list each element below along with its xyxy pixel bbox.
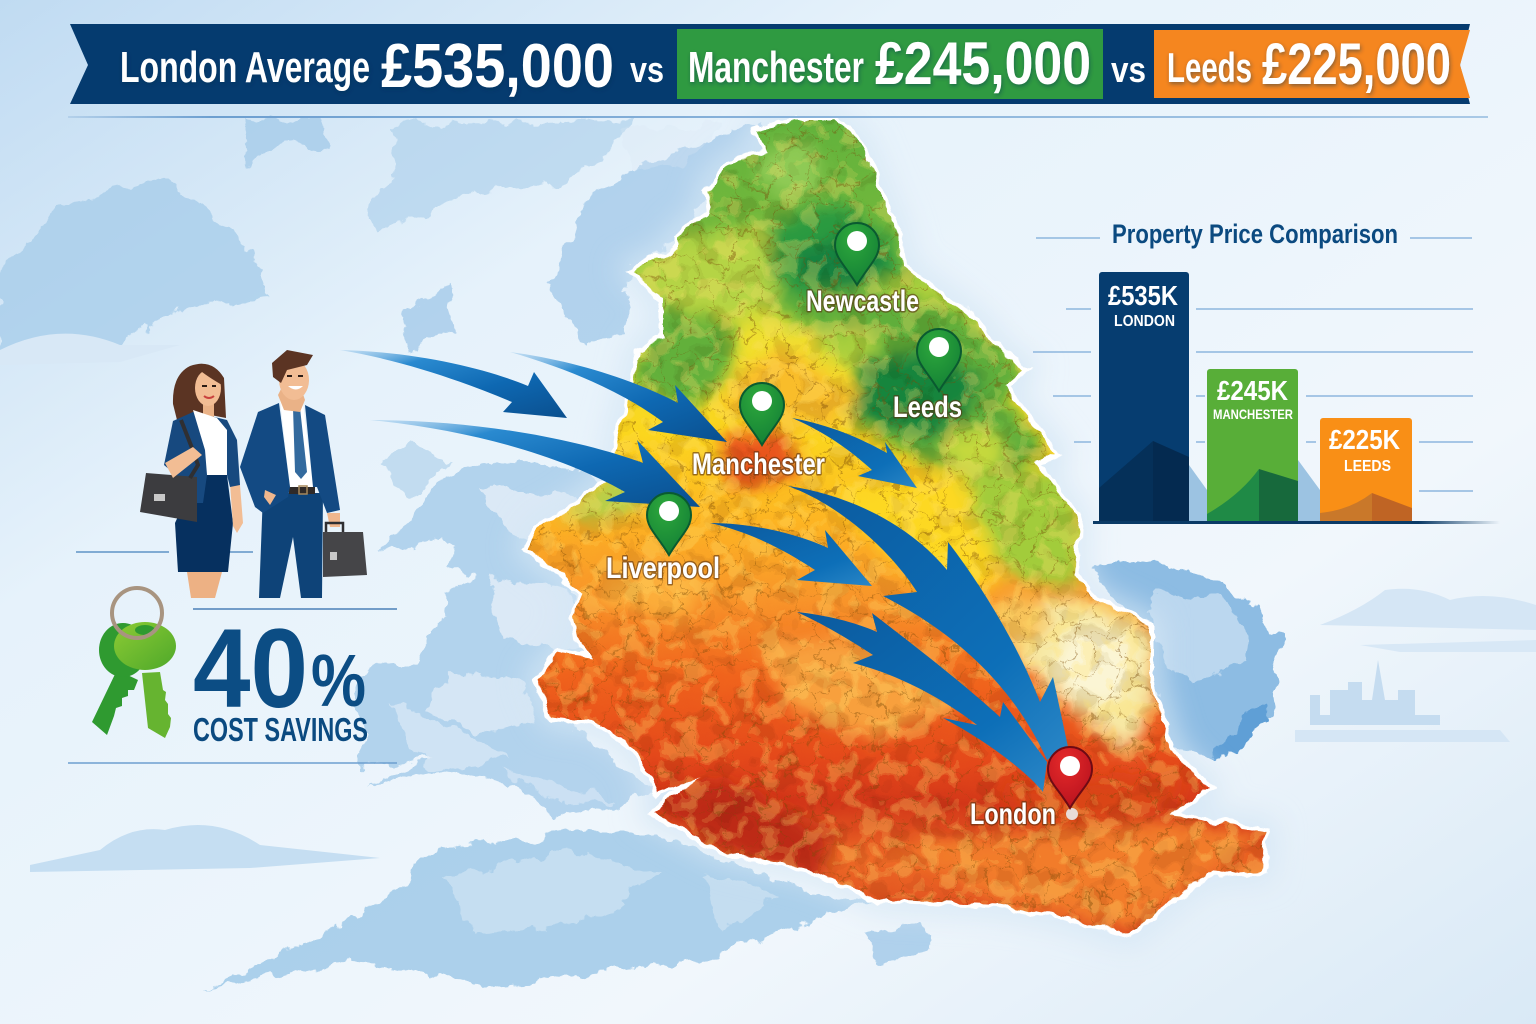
label: Liverpool: Liverpool bbox=[606, 552, 720, 585]
chart: property price comparison bbox=[1033, 219, 1500, 524]
callout: 40% cost savings bbox=[193, 606, 368, 748]
vs: vs bbox=[1111, 49, 1146, 90]
migration arrows bbox=[340, 350, 1068, 792]
heading: London Average: London Average bbox=[120, 43, 370, 92]
bar: London: LONDON bbox=[1114, 313, 1175, 330]
header banner bbox=[70, 24, 1470, 104]
heading: Manchester: Manchester bbox=[688, 43, 864, 92]
bar: Manchester: MANCHESTER bbox=[1213, 406, 1293, 422]
pin: Leeds bbox=[917, 329, 961, 391]
arrow 3 bbox=[370, 420, 700, 507]
value: 245,000: £245,000 bbox=[875, 30, 1091, 97]
percent sign: % bbox=[311, 639, 366, 722]
label: Manchester: Manchester bbox=[692, 448, 825, 481]
map: England price heat map bbox=[512, 110, 1275, 942]
vs: vs bbox=[630, 49, 664, 90]
bar: Manchester bbox=[1207, 369, 1298, 522]
heading: Leeds: Leeds bbox=[1167, 44, 1252, 91]
value: 535,000: £535,000 bbox=[381, 32, 614, 101]
pin: London bbox=[1048, 747, 1092, 820]
pale counties on neighbouring land bbox=[385, 125, 1268, 935]
green panel bbox=[677, 29, 1103, 99]
clouds and distant skyline bbox=[0, 334, 1536, 872]
icon: green keys bbox=[92, 588, 176, 738]
orange panel bbox=[1154, 30, 1470, 98]
illustration: business couple bbox=[140, 350, 367, 598]
pin: Liverpool bbox=[647, 493, 691, 555]
arrow 4 bbox=[792, 418, 917, 488]
pin: Manchester bbox=[740, 383, 784, 445]
man bbox=[240, 350, 367, 598]
bar: Leeds: £225K bbox=[1329, 424, 1400, 455]
arrow 2 bbox=[510, 352, 727, 442]
bar: Leeds: LEEDS bbox=[1344, 458, 1391, 475]
bar: London bbox=[1099, 272, 1189, 522]
arrow 5 bbox=[788, 486, 1068, 760]
label: Newcastle: Newcastle bbox=[806, 285, 919, 318]
neighbouring land masses bbox=[0, 118, 1282, 990]
number 40: 40 bbox=[193, 606, 308, 731]
bar: Leeds bbox=[1320, 418, 1412, 522]
arrow 7 bbox=[797, 612, 1047, 792]
label: Leeds: Leeds bbox=[893, 391, 962, 424]
pin: Newcastle bbox=[835, 223, 879, 285]
arrow 6 bbox=[710, 523, 872, 586]
banner ribbon bbox=[70, 24, 1470, 104]
arrow 1 bbox=[340, 350, 567, 418]
label: London: London bbox=[970, 798, 1056, 831]
chart title: Property Price Comparison bbox=[1112, 219, 1398, 249]
value: 225,000: £225,000 bbox=[1262, 32, 1451, 97]
bar: London: £535K bbox=[1108, 280, 1178, 311]
chart baseline bbox=[1093, 521, 1500, 524]
bar: Manchester: £245K bbox=[1217, 375, 1288, 406]
cost savings label: COST SAVINGS bbox=[193, 711, 368, 748]
woman bbox=[140, 364, 243, 598]
